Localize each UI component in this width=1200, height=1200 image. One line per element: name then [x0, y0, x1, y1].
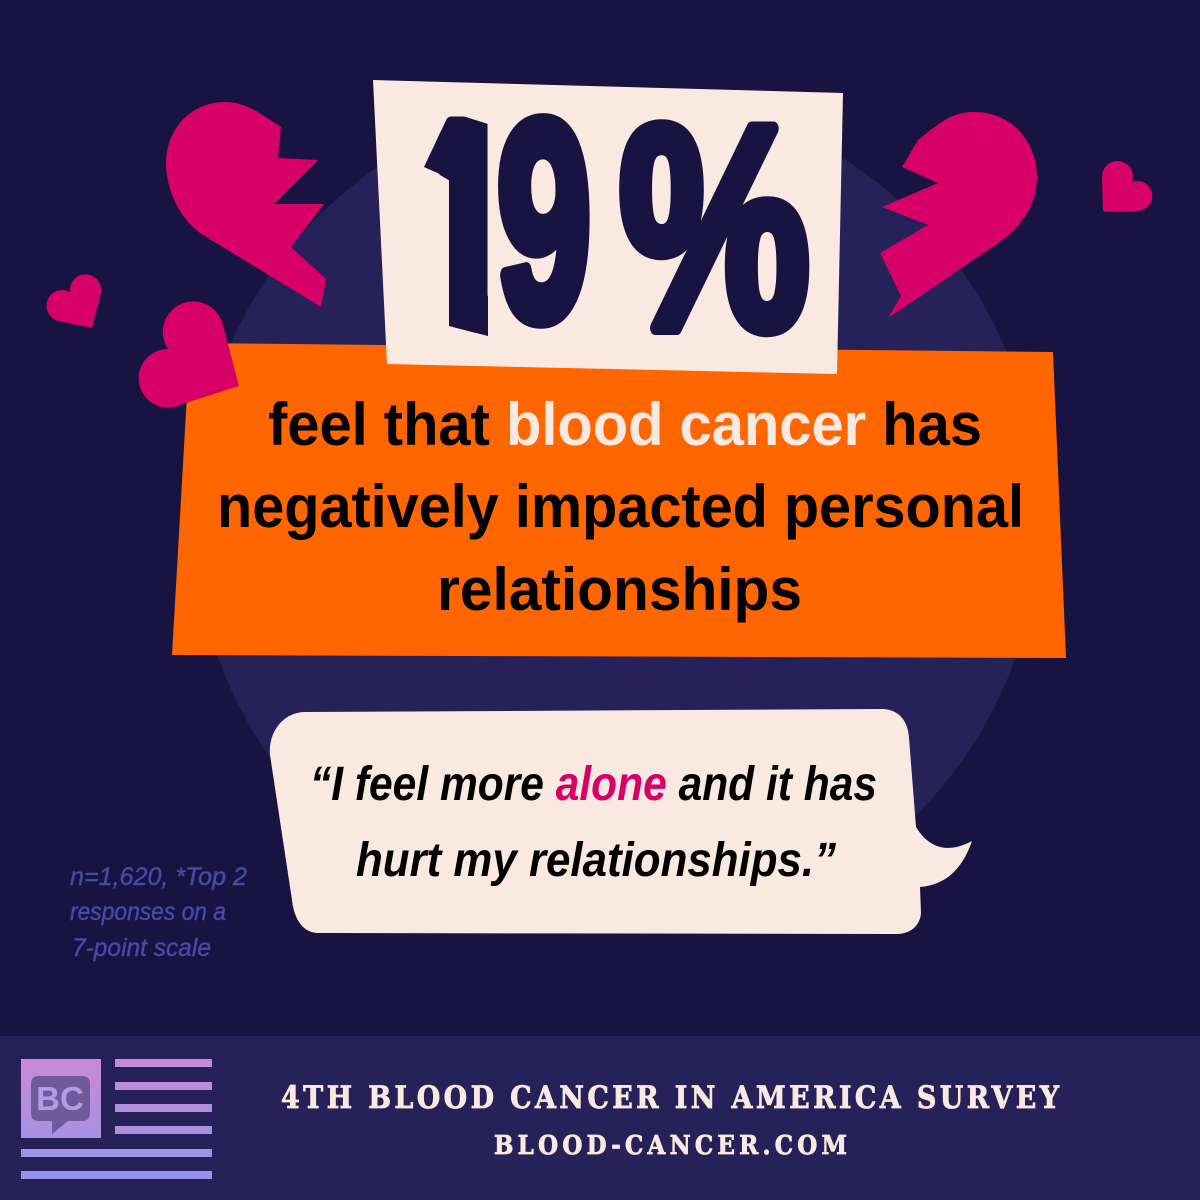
quote text: “I feel more alone and it has	[310, 758, 877, 811]
panel: 19 percent	[373, 80, 843, 374]
statistic: 19%: 9	[497, 63, 591, 379]
panel: orange statement	[172, 343, 1066, 658]
statistic: 19%: 1	[392, 56, 528, 398]
logo: Blood-Cancer.com	[21, 1059, 212, 1179]
footer website: BLOOD-CANCER.COM	[494, 1129, 847, 1160]
icon: broken heart right	[880, 112, 1037, 318]
footnote	[70, 863, 247, 962]
statistic: 19%: %	[619, 67, 810, 391]
panel: quote speech bubble	[270, 709, 972, 934]
footnote: responses on a	[70, 898, 226, 926]
quote text	[310, 758, 877, 887]
icon: broken heart left	[166, 102, 326, 307]
icon: medium heart left	[139, 301, 239, 408]
statement text: feel that blood cancer has	[268, 391, 982, 458]
statement text	[217, 391, 1024, 623]
statistic: 19%	[424, 113, 810, 338]
footer title: 4TH BLOOD CANCER IN AMERICA SURVEY	[281, 1079, 1060, 1115]
panel: footer	[0, 1036, 1200, 1200]
background circle	[218, 158, 1016, 816]
quote text: hurt my relationships.”	[356, 834, 836, 887]
footnote: 7-point scale	[72, 934, 211, 962]
icon: small heart right	[1102, 161, 1152, 211]
statement text: negatively impacted personal	[217, 473, 1024, 540]
footnote: n=1,620, *Top 2	[70, 863, 247, 891]
logo: Blood-Cancer.com: BC	[36, 1080, 84, 1117]
icon: small heart left	[46, 274, 101, 328]
statement text: relationships	[437, 556, 802, 623]
